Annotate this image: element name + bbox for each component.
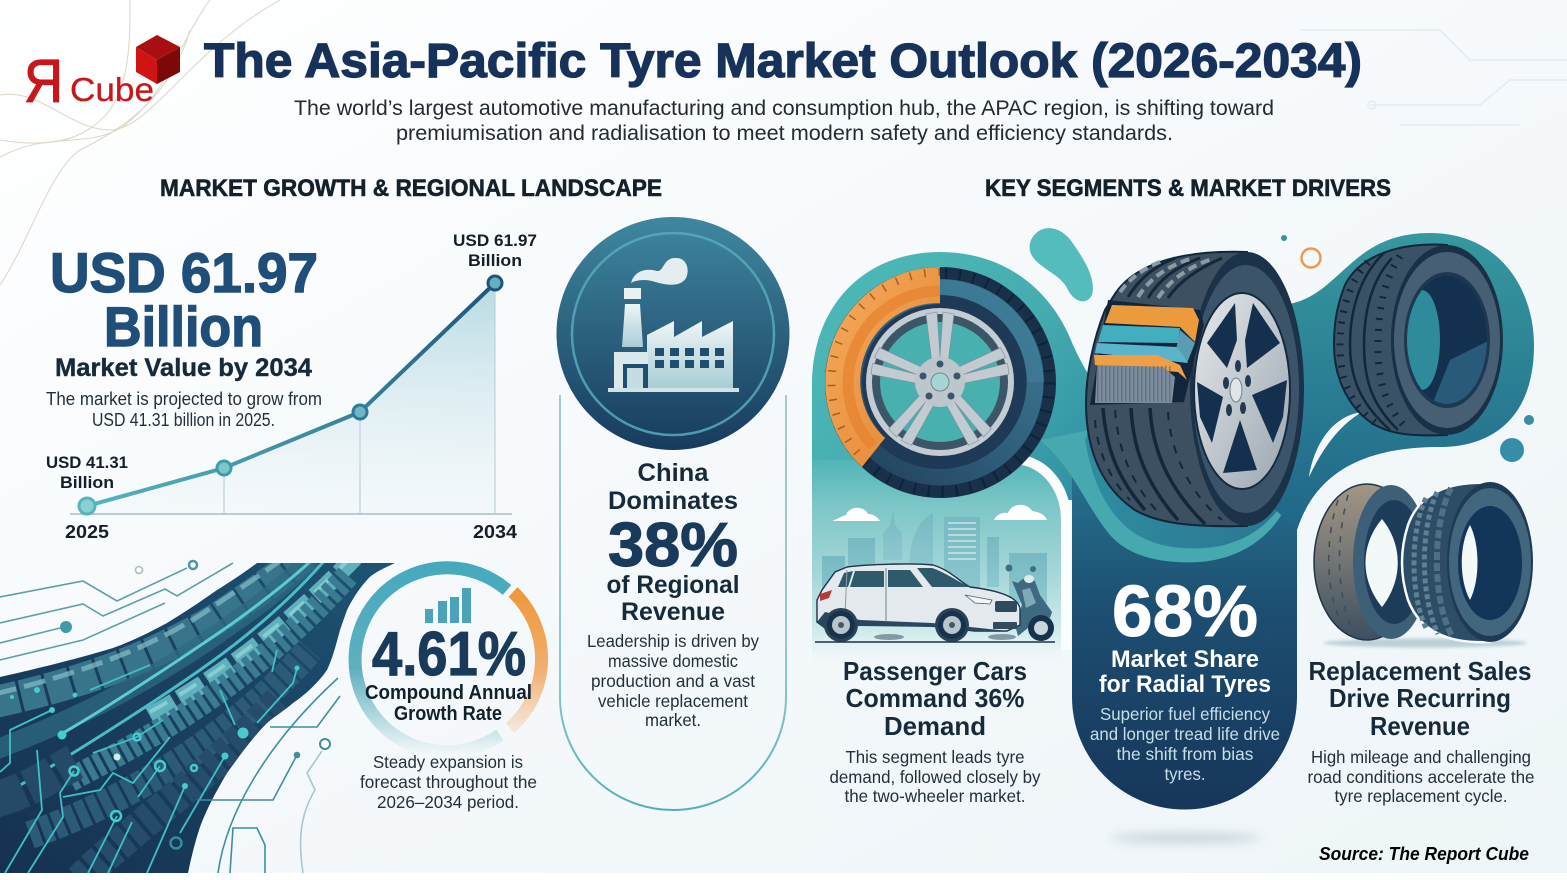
China description: massive domestic [608,651,738,671]
CAGR gauge [355,568,542,752]
replacement sales text: tyre replacement cycle. [1334,786,1508,806]
teal blob: right tyre [1265,233,1534,530]
China description: production and a vast [591,671,755,691]
radial tyres stat: for Radial Tyres [1099,671,1271,698]
icon: growth bars [425,588,471,623]
teal blob: behind left and centre tyres [812,252,1120,500]
market value stat: The market is projected to grow from [46,389,322,409]
lower tread grooves [1103,408,1205,524]
source note: Source: The Report Cube [1319,844,1529,864]
China stat [606,459,740,626]
logo: RCube: Cube [70,71,154,108]
panel: China pill outline [560,395,786,810]
circuit lines left of tread [0,561,233,660]
China stat: 38% [608,511,738,580]
section heading: key segments: KEY SEGMENTS & MARKET DRIVERS [985,175,1391,202]
replacement sales text: Revenue [1370,711,1470,741]
replacement sales text: Replacement Sales [1308,656,1532,686]
radial tyres stat: tyres. [1164,764,1206,784]
circuit lines right of tread [197,678,340,873]
radial tyres stat: Market Share [1111,646,1259,673]
white swoosh highlight [1309,412,1362,477]
replacement sales text [1308,656,1534,806]
China stat: Revenue [621,598,725,626]
CAGR gauge: 4.61% [372,620,526,689]
car body [874,634,904,640]
radial tyres stat [1090,572,1280,784]
title: The Asia-Pacific Tyre Market Outlook (2026-2034) [204,35,1362,88]
replacement sales text: Drive Recurring [1329,683,1511,713]
icon: upper right tyre [1334,245,1503,435]
China stat: Dominates [608,487,738,515]
icon: worn tyre [1314,484,1429,640]
subtitle: The world’s largest automotive manufacturing and consumption hub, the APAC region, is shifting toward [294,97,1274,120]
tyre tread with circuit graphic [0,550,400,880]
section heading: market growth: MARKET GROWTH & REGIONAL LANDSCAPE [160,175,662,202]
market value stat: Billion [104,295,263,358]
panel: centre navy radial tyres [1072,470,1297,810]
faint circuit lines top-right [1300,30,1567,125]
China description: vehicle replacement [598,691,748,711]
decorative thread lines top-left [0,0,280,285]
passenger cars text: Demand [884,711,986,741]
passenger cars text [830,656,1041,806]
skyline [822,510,1047,606]
market value stat: USD 41.31 billion in 2025. [92,410,275,430]
passenger cars text: demand, followed closely by [830,767,1041,787]
centre panel shadow [1110,833,1260,843]
CAGR description [360,752,537,812]
panel: passenger car scene [812,460,1066,665]
radial tyres stat: and longer tread life drive [1090,724,1280,744]
icon: left tyre [825,267,1056,498]
cutaway layers [1090,300,1204,405]
CAGR description: forecast throughout the [360,772,537,792]
icon: tyre shadow [1323,638,1527,648]
market value stat: Market Value by 2034 [55,354,312,382]
radial tyres stat: 68% [1112,572,1258,652]
CAGR description: 2026–2034 period. [377,792,519,812]
subtitle [294,97,1274,145]
icon: car and scooter [815,564,1055,642]
icon: factory badge [556,217,790,450]
passenger cars text: This segment leads tyre [846,747,1024,767]
China stat: of Regional [606,571,740,599]
upper tread grooves [1128,258,1222,298]
line chart: market growth: 2034 [473,522,517,542]
CAGR gauge: Growth Rate [394,703,502,725]
passenger cars text: the two-wheeler market. [844,786,1026,806]
decorative dots and ring [1281,235,1534,462]
scooter [1006,564,1054,641]
CAGR description: Steady expansion is [373,752,523,772]
line chart: market growth [46,231,537,542]
China description: market. [645,710,701,730]
icon: centre radial tyre with cutaway [1086,252,1304,526]
replacement sales text: road conditions accelerate the [1308,767,1534,787]
logo: RCube: Я [24,48,63,115]
blue inner swoosh behind centre tyre [1085,400,1297,548]
line chart: market growth: 2025 [65,522,109,542]
China description: Leadership is driven by [587,631,759,651]
line chart: market growth: Billion [60,473,114,492]
line chart: market growth: Billion [468,251,522,270]
teal swoosh behind centre tyre [1040,430,1297,562]
CAGR gauge: Compound Annual [365,682,532,704]
China stat: China [638,459,710,487]
market value stat: USD 61.97 [50,241,318,304]
line chart: market growth: USD 41.31 [46,453,128,472]
China description [587,631,759,730]
line chart: market growth: USD 61.97 [453,231,537,250]
radial tyres stat: Superior fuel efficiency [1100,704,1270,724]
passenger cars text: Passenger Cars [843,656,1027,686]
teal droplet decoration [1030,228,1093,301]
sidewall [1190,252,1304,526]
market value stat [46,241,322,430]
passenger cars text: Command 36% [846,683,1024,713]
replacement sales text: High mileage and challenging [1311,747,1531,767]
subtitle: premiumisation and radialisation to meet modern safety and efficiency standards. [396,122,1173,145]
icon: new tyre [1402,482,1533,642]
rim windows [1197,303,1287,473]
logo: RCube [24,35,180,115]
radial tyres stat: the shift from bias [1116,744,1254,764]
